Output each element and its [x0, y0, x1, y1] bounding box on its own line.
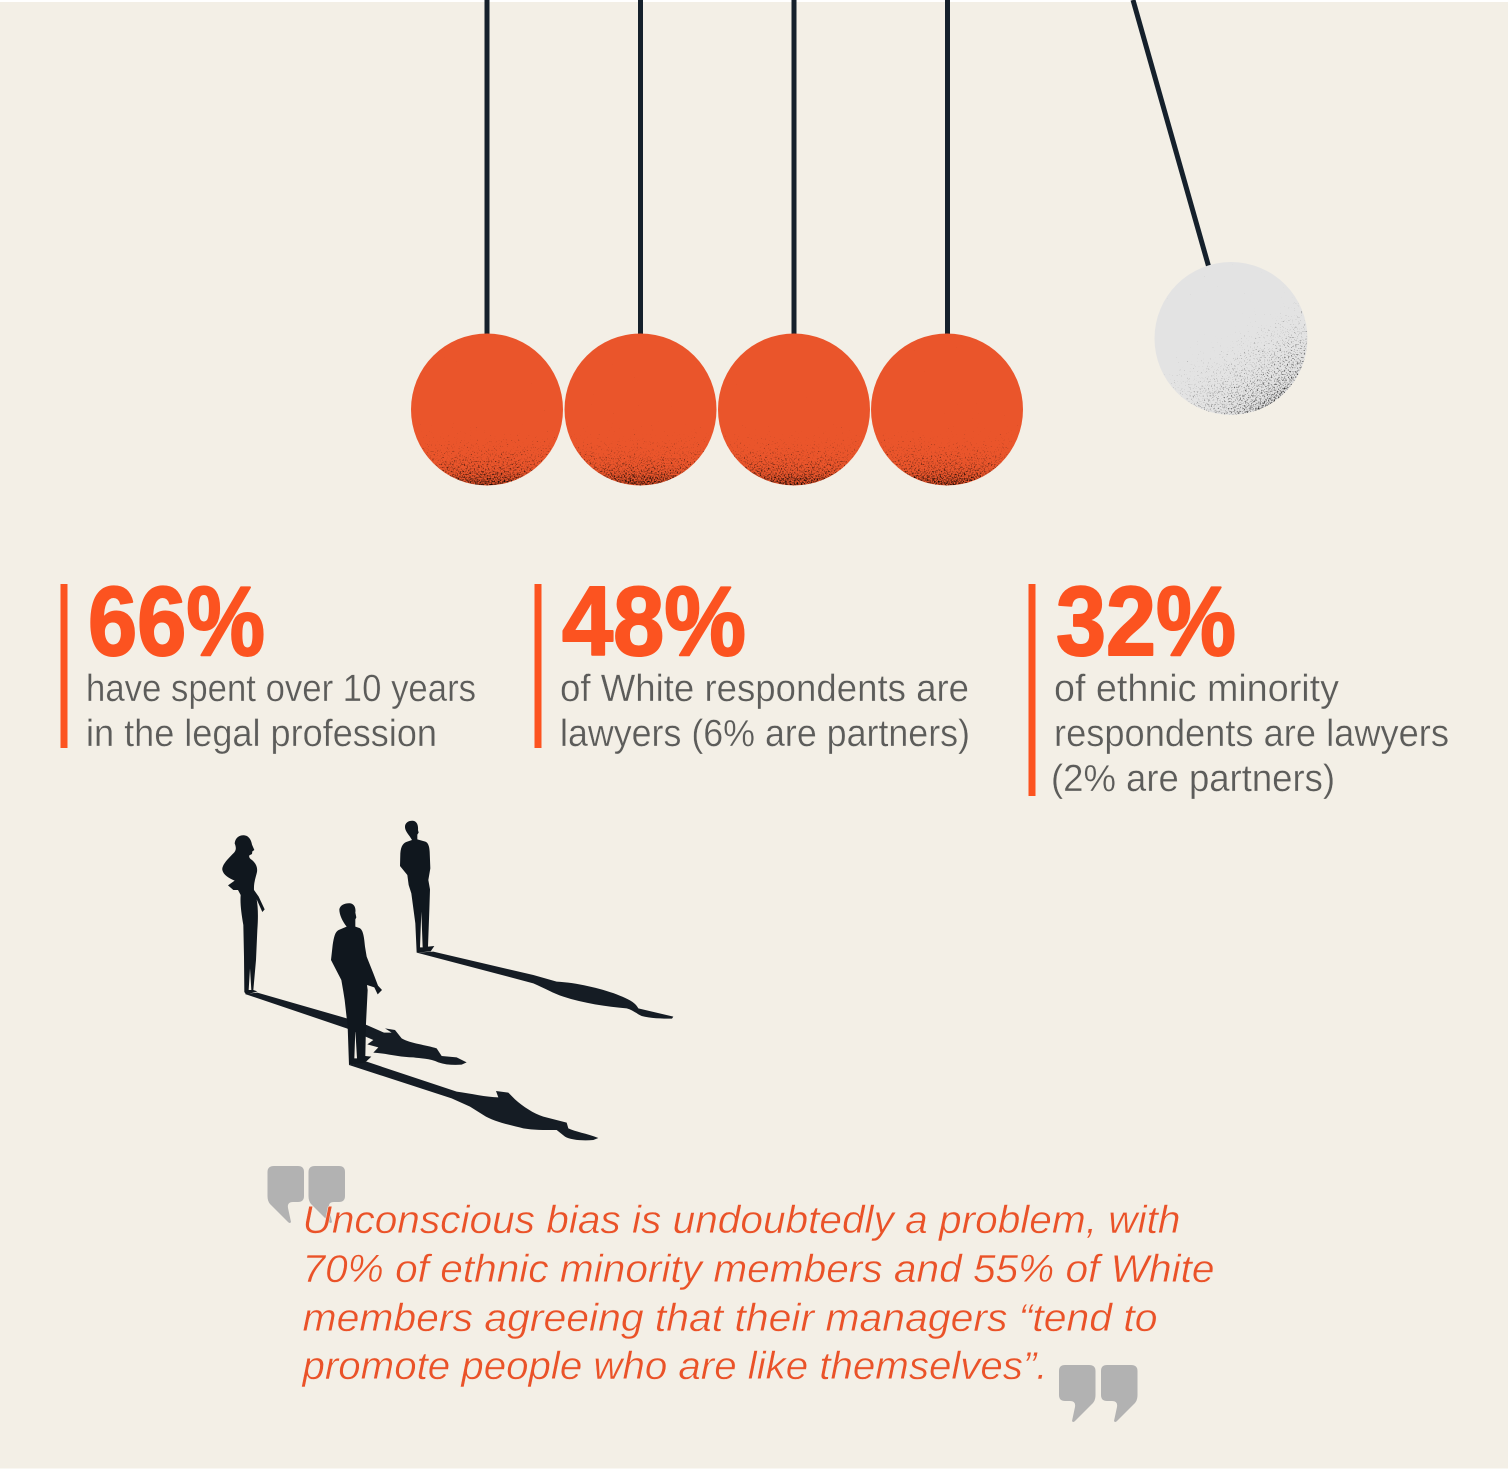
shadow of woman [245, 993, 467, 1065]
description: of White respondents are [560, 668, 969, 710]
string 2 [638, 0, 643, 336]
woman silhouette [222, 835, 265, 994]
stat: 48% [534, 566, 970, 755]
description: respondents are lawyers [1054, 713, 1449, 755]
people with long shadows illustration [222, 821, 673, 1140]
orange ball 3 [718, 334, 870, 486]
pull quote: promote people who are like themselves”. [301, 1345, 1048, 1388]
stat: 66% [60, 566, 476, 755]
icon: closing quotation marks [1059, 1365, 1138, 1422]
stat: 32% [1028, 566, 1449, 800]
man in front silhouette [331, 903, 382, 1065]
figure: 66% [88, 566, 265, 676]
string 3 [792, 0, 796, 336]
description: lawyers (6% are partners) [560, 713, 970, 755]
icon: opening quotation marks [268, 1166, 345, 1223]
pendulum illustration [411, 0, 1308, 486]
description: of ethnic minority [1054, 668, 1339, 710]
pull quote: members agreeing that their managers “tend to [302, 1297, 1158, 1340]
figure: 48% [562, 566, 746, 676]
string 1 [484, 0, 490, 336]
pull quote: 70% of ethnic minority members and 55% of White [302, 1248, 1214, 1291]
string 4 [945, 0, 950, 336]
accent bar [534, 584, 542, 748]
white swinging ball [1154, 262, 1308, 415]
description: have spent over 10 years [86, 668, 476, 710]
orange ball 1 [411, 334, 563, 486]
pull quote: Unconscious bias is undoubtedly a problem, with [302, 1199, 1180, 1242]
orange ball 2 [564, 334, 716, 486]
man at back silhouette [400, 821, 434, 953]
shadow of man at back [417, 952, 673, 1019]
shadow of front man [349, 1062, 598, 1140]
description: (2% are partners) [1051, 758, 1335, 800]
swinging string [1133, 0, 1208, 266]
accent bar [1028, 584, 1036, 796]
orange ball 4 [871, 334, 1023, 486]
description: in the legal profession [86, 713, 437, 755]
accent bar [60, 584, 68, 748]
figure: 32% [1056, 566, 1236, 676]
